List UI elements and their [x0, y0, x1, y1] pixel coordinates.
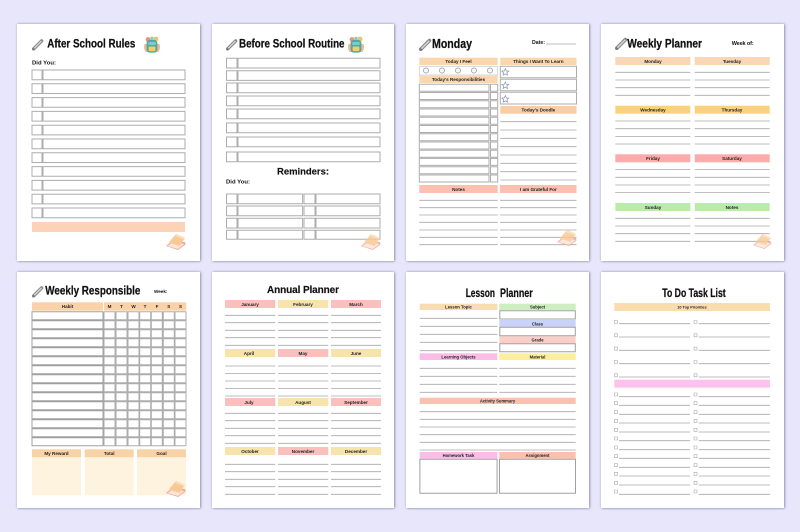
month headers: January [241, 302, 259, 307]
heading: Weekly Planner [627, 37, 702, 51]
heading: reminders: Reminders: [277, 166, 329, 178]
section headers: Class [532, 321, 544, 326]
icon: backpack [144, 37, 160, 53]
responsibilities rows [419, 84, 498, 182]
text: week: Week: [154, 289, 168, 294]
day headers: Saturday [722, 156, 742, 161]
habit table header: S [179, 304, 182, 309]
panel: Monday [406, 24, 589, 261]
icon: book [166, 234, 186, 250]
month headers: November [292, 449, 314, 454]
day headers: Notes [726, 205, 739, 210]
section headers: Learning Objects [441, 354, 476, 359]
day headers: Thursday [722, 108, 743, 112]
pink divider bar [614, 380, 770, 388]
heading: After School Rules [47, 38, 135, 50]
panel: Annual Planner [212, 272, 394, 508]
month headers: June [351, 351, 362, 356]
top priorities header: 10 Top Priorities [677, 306, 707, 310]
habit table header: M [108, 304, 112, 309]
section headers: Activity Summary [480, 399, 516, 404]
panel: Weekly Planner [601, 24, 784, 261]
checklist rows [226, 58, 380, 162]
day headers: Tuesday [723, 59, 742, 64]
habit table header: S [167, 304, 170, 309]
section headers: Today I Feel [445, 59, 472, 64]
habit table header: F [156, 304, 159, 309]
heading: Before School Routine [239, 38, 344, 50]
habit tracker cells [104, 312, 186, 446]
icon: book [361, 234, 380, 250]
checklist rows [32, 70, 185, 218]
icon: pencil [32, 288, 42, 297]
icons: stars [502, 68, 509, 102]
month headers: August [295, 400, 311, 405]
text: date: Date: [532, 40, 545, 46]
heading: Planner [500, 288, 533, 300]
icon: book [753, 234, 771, 249]
section headers: Assignment [526, 453, 550, 458]
task lines [619, 324, 770, 494]
day headers [615, 57, 770, 211]
month headers: February [293, 302, 313, 307]
icon: pencil [226, 41, 236, 50]
icon: pencil [32, 41, 42, 50]
habit table header: T [120, 304, 123, 309]
text: week of: Week of: [732, 41, 754, 47]
reward, total and goal boxes: Goal [156, 451, 167, 456]
habit table header: W [131, 304, 136, 309]
ruled lines [419, 44, 576, 245]
checkboxes [614, 320, 697, 493]
reward, total and goal boxes: My Reward [44, 451, 69, 456]
month headers: October [241, 449, 259, 454]
month headers: May [299, 351, 308, 356]
text: did you: Did You: [226, 180, 250, 186]
heading: Annual Planner [267, 285, 339, 296]
section headers: Lesson Topic [445, 305, 473, 310]
month headers: December [345, 449, 367, 454]
section headers: I am Grateful For [520, 187, 557, 192]
month headers: March [349, 302, 363, 307]
ruled lines [420, 318, 576, 450]
section headers: Today's Doodle [522, 108, 556, 112]
text: did you: Did You: [32, 60, 56, 66]
habit table header [32, 302, 186, 311]
icon: book [166, 481, 186, 497]
ruled lines [225, 315, 381, 494]
ruled lines [615, 72, 770, 241]
month headers: September [344, 400, 368, 405]
learning boxes [500, 66, 576, 104]
input boxes [420, 311, 576, 493]
reward, total and goal boxes: Total [104, 451, 115, 456]
top priorities header [614, 303, 770, 311]
panel: Lesson Planner [406, 272, 589, 508]
section headers: Things I Want To Learn [513, 59, 564, 64]
peach bar [32, 222, 185, 232]
section headers: Material [530, 354, 545, 359]
section headers: Notes [452, 187, 465, 192]
month headers [225, 300, 381, 455]
section headers [419, 58, 576, 193]
section headers: Homework Task [443, 453, 475, 458]
section headers [420, 304, 576, 459]
panel: Weekly Responsible [17, 272, 200, 508]
section headers: Today's Responsibilities [432, 77, 486, 82]
heading: Lesson [466, 288, 495, 300]
habit table header: Habit [62, 304, 74, 309]
month headers: April [244, 351, 254, 356]
panel: After School Rules [17, 24, 200, 261]
icon: pencil [615, 40, 625, 50]
section headers: Grade [531, 338, 544, 343]
day headers: Wednesday [640, 108, 666, 112]
heading: Monday [432, 37, 472, 51]
panel: Before School Routine [212, 24, 394, 261]
feelings row [419, 66, 498, 75]
reminder rows [226, 194, 380, 239]
icon: book [557, 230, 576, 246]
heading: To Do Task List [662, 288, 726, 300]
heading: Weekly Responsible [45, 283, 141, 297]
icon: backpack [348, 37, 364, 53]
month headers: July [244, 400, 254, 405]
day headers: Friday [646, 156, 660, 161]
day headers: Sunday [645, 205, 662, 210]
habit table rows [32, 312, 103, 446]
day headers: Monday [644, 59, 662, 64]
habit table header: T [144, 304, 147, 309]
section headers: Subject [530, 305, 546, 310]
panel: To Do Task List [601, 272, 784, 508]
reward, total and goal boxes [32, 449, 186, 495]
heading [466, 288, 533, 300]
icon: pencil [419, 41, 429, 51]
